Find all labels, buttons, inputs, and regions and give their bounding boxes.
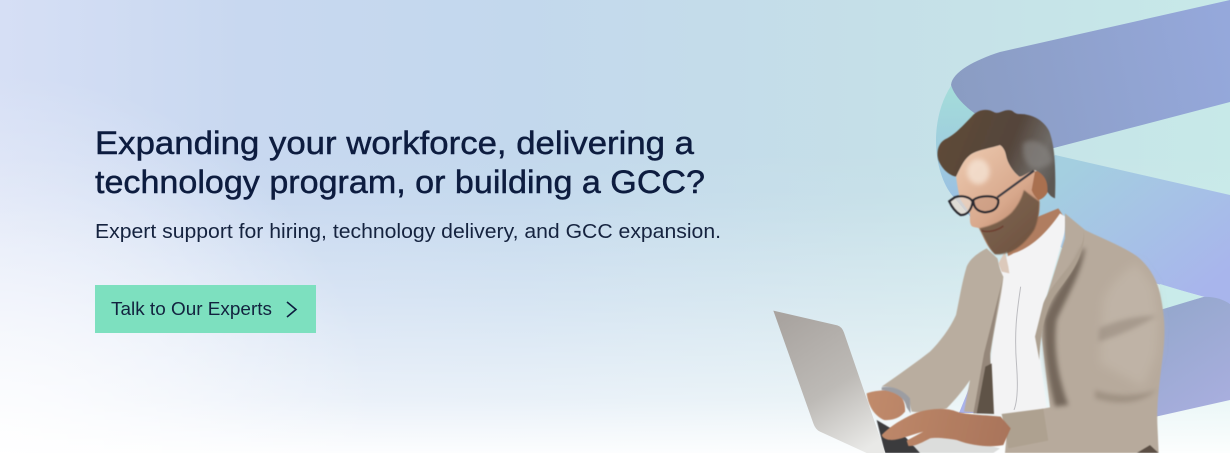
- jacket hem shadow: [1137, 445, 1159, 453]
- head: [937, 110, 1055, 255]
- neck: [1007, 208, 1065, 272]
- jacket inner shadow: [973, 277, 1003, 413]
- laptop lid: [773, 311, 885, 453]
- right hand: [882, 409, 1011, 446]
- mouth: [982, 226, 1003, 231]
- laptop: [773, 311, 1000, 453]
- jacket torso: [1005, 213, 1164, 453]
- shirt cuff: [882, 387, 911, 413]
- lapel: [1035, 214, 1084, 360]
- glasses: [949, 171, 1034, 215]
- call-to-action button: [95, 285, 316, 333]
- jacket left sleeve and shoulder: [882, 248, 1003, 413]
- beard: [979, 190, 1039, 255]
- left hand: [867, 390, 905, 420]
- jacket: [882, 213, 1164, 453]
- knit cuff: [1002, 409, 1048, 448]
- shirt placket: [1014, 287, 1021, 410]
- person working on laptop: [773, 110, 1164, 453]
- jacket shadow under lapel: [1044, 248, 1085, 407]
- heading: technology program, or building a GCC?: [95, 164, 705, 200]
- hair grey patch: [1023, 141, 1053, 168]
- sleeve folds: [1098, 316, 1157, 342]
- hands: [867, 387, 1011, 446]
- ear: [1032, 171, 1050, 200]
- call-to-action button: Talk to Our Experts: [111, 299, 272, 319]
- sleeve shoulder highlight: [1100, 263, 1158, 387]
- shirt: [990, 213, 1066, 415]
- heading: [95, 125, 705, 200]
- subheading: Expert support for hiring, technology delivery, and GCC expansion.: [95, 221, 721, 243]
- decorative ribbon shapes: [936, 0, 1230, 418]
- face highlight: [967, 159, 990, 184]
- face: [956, 145, 1040, 254]
- hair: [937, 110, 1055, 198]
- laptop base: [885, 433, 1000, 453]
- icon: chevron right: [287, 302, 296, 317]
- collar shading: [998, 252, 1009, 273]
- keyboard: [877, 420, 920, 453]
- heading: Expanding your workforce, delivering a: [95, 125, 694, 161]
